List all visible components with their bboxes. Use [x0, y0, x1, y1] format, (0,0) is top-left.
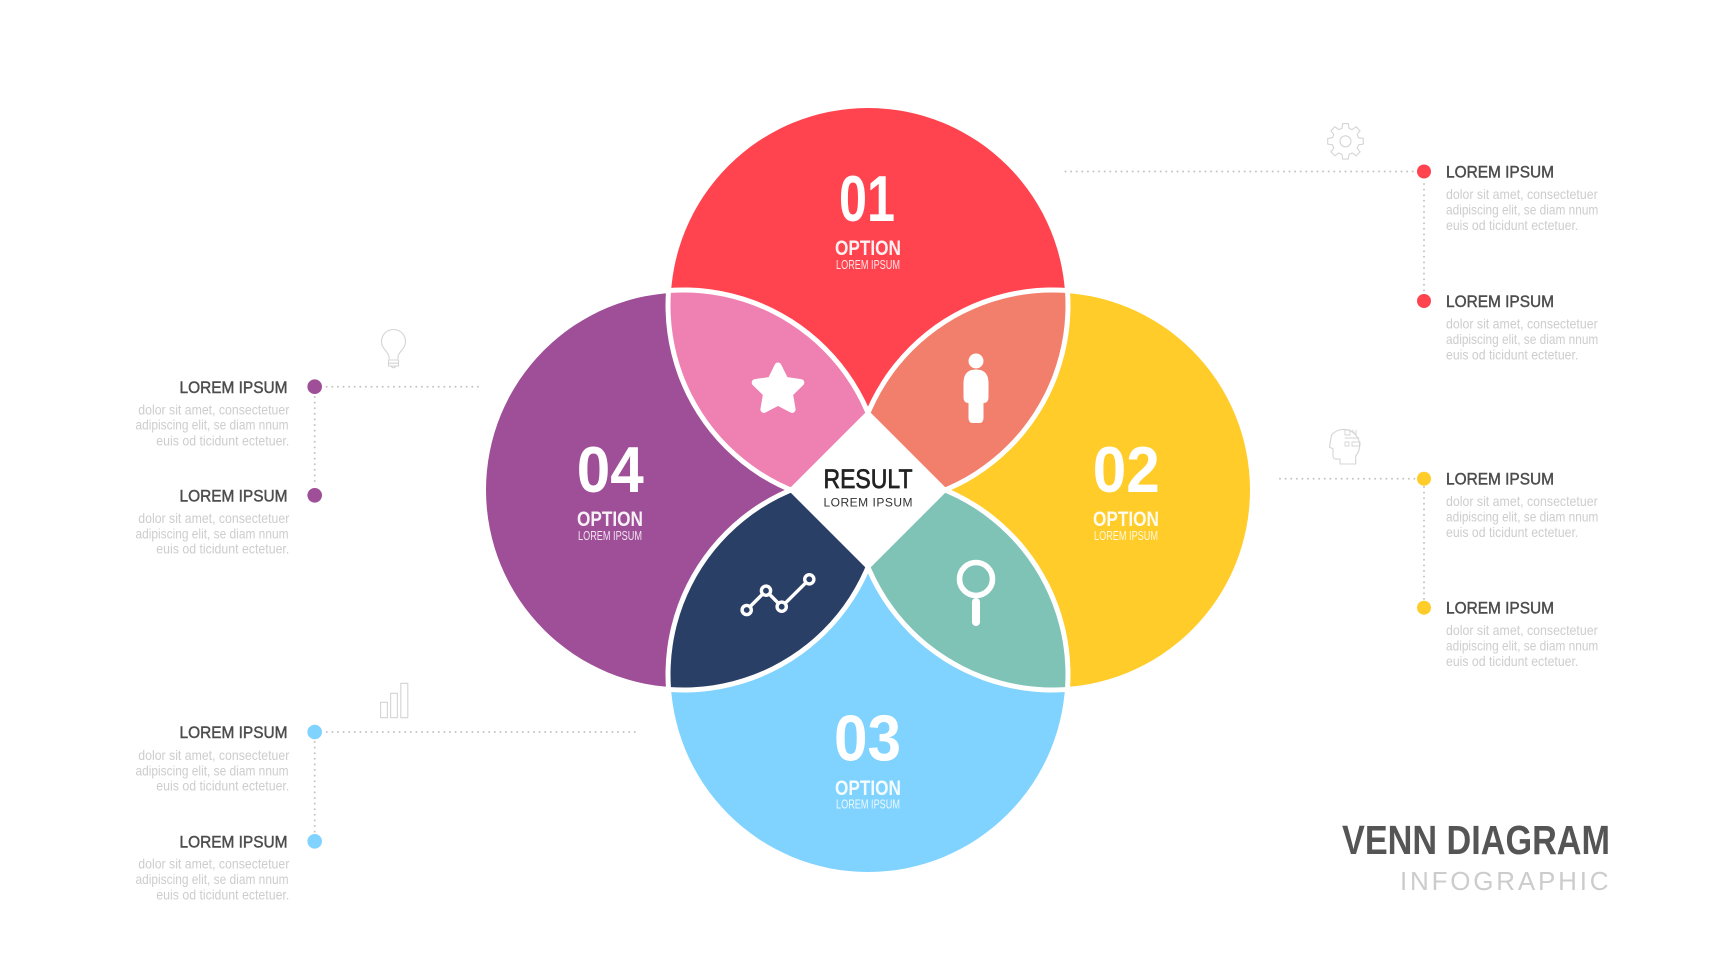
circle 01 red [670, 108, 1066, 503]
label: option 01: LOREM IPSUM [836, 258, 900, 272]
text block 1 [1446, 162, 1598, 233]
bullet dots [1417, 164, 1431, 308]
text block 2: dolor sit amet, consectetuer [138, 510, 290, 526]
text block 2: dolor sit amet, consectetuer [1446, 316, 1598, 332]
label: option 02: LOREM IPSUM [1094, 529, 1158, 543]
label: option 03: LOREM IPSUM [836, 798, 900, 812]
callout: right group 02 [1280, 429, 1598, 669]
overlap 01-02 coral [855, 293, 1065, 503]
connector lines [1066, 172, 1424, 293]
icon: light bulb [382, 330, 406, 368]
label: option 04 [577, 433, 644, 543]
text block 2: dolor sit amet, consectetuer [138, 856, 290, 872]
text block 1: dolor sit amet, consectetuer [1446, 493, 1598, 509]
title: VENN DIAGRAM [1342, 817, 1610, 863]
text block 1: euis od ticidunt ectetuer. [156, 778, 289, 794]
text block 2: euis od ticidunt ectetuer. [1446, 346, 1578, 362]
text block 2: adipiscing elit, se diam nnum [136, 525, 288, 541]
label: option 02: 02 [1093, 433, 1160, 506]
connector lines [1280, 479, 1424, 599]
text block 1: adipiscing elit, se diam nnum [1446, 202, 1598, 218]
text block 1: LOREM IPSUM [1446, 470, 1554, 488]
label: option 01: 01 [839, 162, 895, 235]
text block 2: LOREM IPSUM [1446, 292, 1554, 311]
label: option 04: LOREM IPSUM [578, 529, 642, 543]
text block 1: LOREM IPSUM [1446, 162, 1554, 182]
label: option 02 [1093, 433, 1160, 543]
connector lines [315, 732, 637, 832]
icon: person [964, 354, 988, 423]
callout: right group 01 [1066, 124, 1598, 362]
text block 2 [136, 486, 290, 557]
callout: left group 03 [136, 683, 637, 902]
overlap 03-04 navy [671, 477, 881, 687]
icon: line chart [742, 575, 814, 615]
text block 1: euis od ticidunt ectetuer. [1446, 524, 1578, 540]
icon: gear [1328, 124, 1363, 159]
center result label [824, 464, 912, 510]
icon: head [1330, 429, 1360, 464]
overlap 04-01 pink [671, 293, 881, 503]
label: option 01 [835, 162, 901, 272]
text block 2 [1446, 292, 1598, 362]
text block 1 [136, 378, 290, 448]
text block 2: adipiscing elit, se diam nnum [136, 871, 288, 887]
connector lines [315, 387, 482, 486]
text block 1: euis od ticidunt ectetuer. [1446, 217, 1578, 233]
text block 2: LOREM IPSUM [1446, 598, 1554, 618]
text block 2: LOREM IPSUM [180, 832, 288, 852]
text block 2: adipiscing elit, se diam nnum [1446, 638, 1598, 654]
circle 02 yellow [855, 292, 1250, 688]
text block 2: euis od ticidunt ectetuer. [1446, 653, 1578, 669]
icon: star [755, 366, 801, 409]
text block 1: adipiscing elit, se diam nnum [1446, 508, 1598, 524]
text block 2: LOREM IPSUM [180, 486, 288, 506]
text block 2: euis od ticidunt ectetuer. [156, 886, 289, 902]
center diamond [788, 410, 948, 570]
text block 2 [136, 832, 290, 902]
callout: left group 04 [136, 330, 482, 557]
overlap 02-03 teal [855, 477, 1065, 687]
circle 04 purple [486, 292, 881, 688]
circle 03 blue [670, 477, 1066, 872]
text block 1 [136, 723, 290, 794]
text block 2 [1446, 598, 1598, 669]
text block 1: LOREM IPSUM [180, 378, 288, 397]
label: option 04: 04 [577, 433, 644, 506]
text block 1 [1446, 470, 1598, 540]
icon: magnifier [960, 562, 992, 622]
icon: bar chart [381, 683, 408, 718]
text block 2: euis od ticidunt ectetuer. [156, 541, 289, 557]
label: option 03 [834, 702, 901, 812]
label: option 04: OPTION [577, 508, 643, 531]
text block 1: adipiscing elit, se diam nnum [136, 417, 288, 433]
bullet dots [1417, 472, 1431, 615]
label: option 01: OPTION [835, 237, 901, 260]
center result label: LOREM IPSUM [824, 496, 912, 510]
text block 1: dolor sit amet, consectetuer [138, 747, 290, 763]
label: option 02: OPTION [1093, 508, 1159, 531]
text block 1: dolor sit amet, consectetuer [1446, 186, 1598, 202]
bullet dots [307, 725, 322, 849]
title: INFOGRAPHIC [1400, 866, 1608, 896]
venn diagram [486, 108, 1250, 872]
text block 1: dolor sit amet, consectetuer [138, 401, 290, 417]
text block 1: adipiscing elit, se diam nnum [136, 762, 288, 778]
text block 2: dolor sit amet, consectetuer [1446, 622, 1598, 638]
text block 1: euis od ticidunt ectetuer. [156, 432, 289, 448]
label: option 03: OPTION [835, 777, 901, 800]
text block 2: adipiscing elit, se diam nnum [1446, 331, 1598, 347]
text block 1: LOREM IPSUM [180, 723, 288, 742]
bullet dots [307, 379, 322, 503]
center result label: RESULT [824, 464, 912, 494]
white lens outlines [666, 288, 1070, 692]
label: option 03: 03 [834, 702, 901, 774]
title [1342, 817, 1610, 896]
